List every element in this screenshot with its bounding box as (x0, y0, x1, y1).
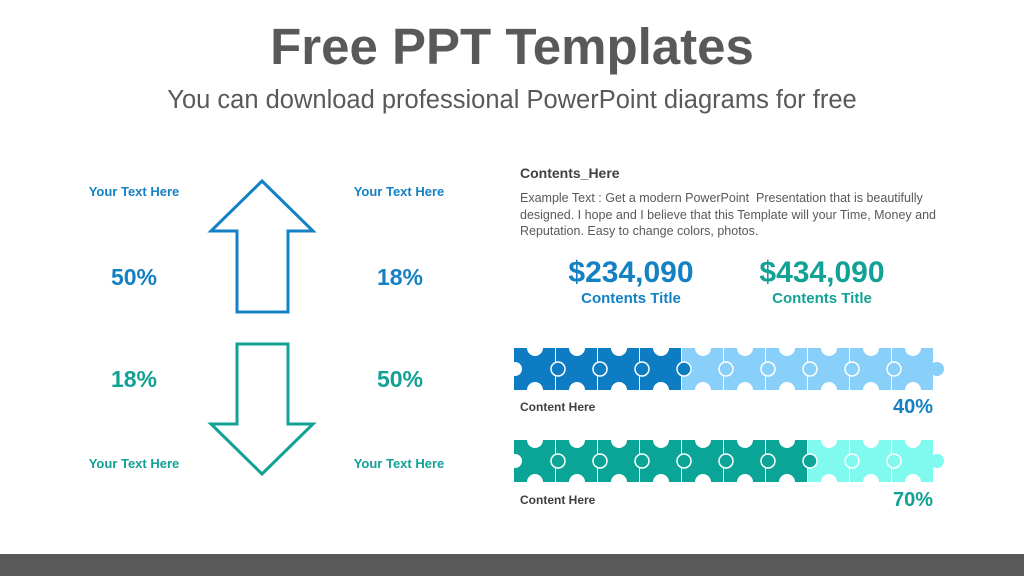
text: 18% (111, 366, 157, 392)
title: Free PPT Templates (270, 18, 754, 75)
left labels: Your Text Here (89, 184, 179, 199)
stat 2 (759, 256, 885, 307)
footer bar (0, 554, 1024, 576)
stat 1: $234,090 (568, 256, 694, 289)
text: Your Text Here (89, 456, 179, 471)
bar 1 labels: Content Here (520, 400, 595, 414)
subtitle: You can download professional PowerPoint diagrams for free (167, 86, 857, 114)
right labels: Your Text Here (354, 184, 444, 199)
text: 50% (111, 264, 157, 290)
stat 2: Contents Title (772, 290, 872, 307)
text: 70% (893, 489, 933, 511)
puzzle bar 1 (508, 340, 944, 398)
puzzle bar 2 (508, 432, 944, 490)
bar 2 labels: Content Here (520, 493, 595, 507)
text: 50% (377, 366, 423, 392)
stat 1: Contents Title (581, 290, 681, 307)
heading: contents: Contents_Here (520, 165, 620, 181)
stat 1 (568, 256, 694, 307)
text: Your Text Here (354, 456, 444, 471)
arrow down (211, 344, 313, 474)
stat 2: $434,090 (759, 256, 885, 289)
body text: Example Text : Get a modern PowerPoint Presentation that is beautifully designed. I hope and I believe that this Template will your Time, Money and Reputation. Easy to change colors, photos. (520, 191, 936, 238)
arrow up (211, 181, 313, 312)
text: 40% (893, 396, 933, 418)
text: 18% (377, 264, 423, 290)
